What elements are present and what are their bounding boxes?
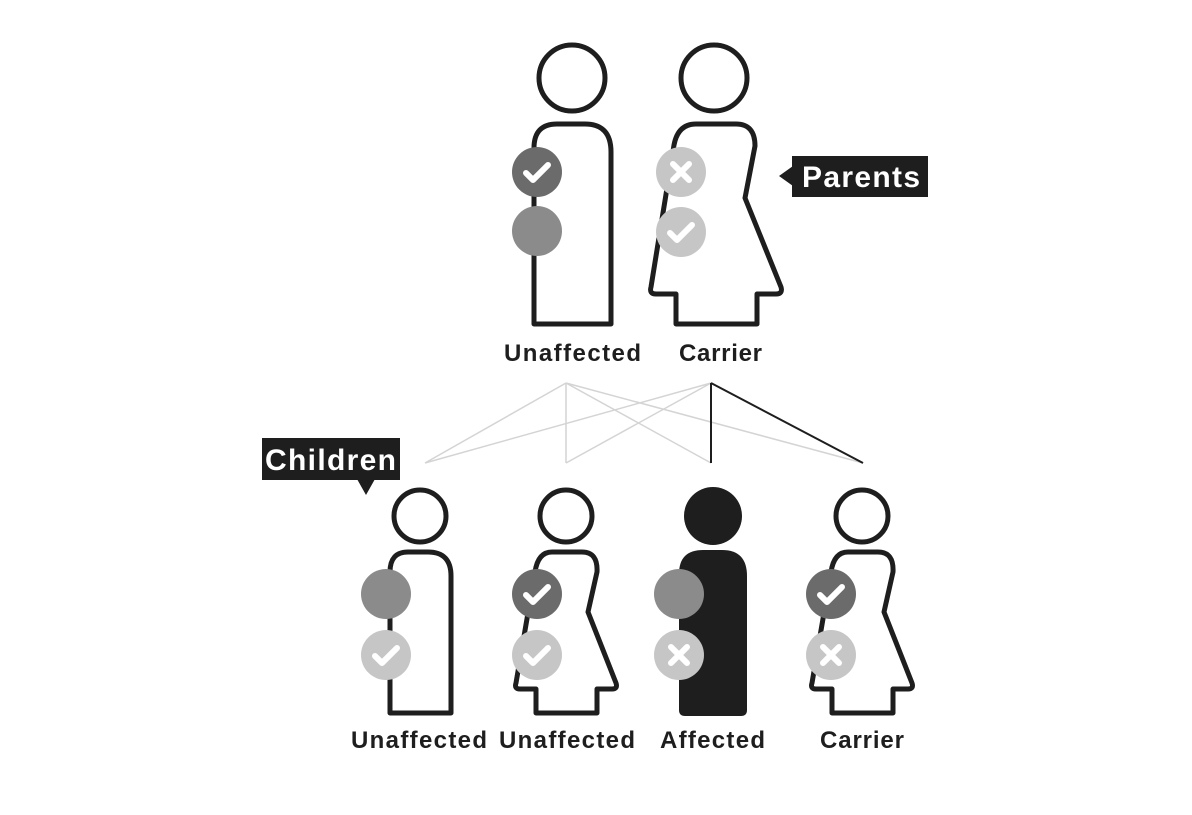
parent: carrier female bbox=[651, 45, 781, 324]
children labels bbox=[351, 727, 904, 754]
connection lines bbox=[425, 383, 863, 463]
children labels: Unaffected bbox=[499, 727, 635, 754]
children labels: Affected bbox=[660, 727, 765, 754]
parent labels: Unaffected bbox=[504, 340, 641, 367]
parent labels bbox=[504, 340, 762, 367]
child 3: affected male bbox=[654, 487, 747, 716]
parent labels: Carrier bbox=[679, 340, 762, 367]
children labels: Carrier bbox=[820, 727, 904, 754]
callout: Children: Children bbox=[265, 444, 396, 477]
child 4: carrier female bbox=[806, 490, 912, 713]
callout: Children bbox=[262, 438, 400, 495]
child 2: unaffected female bbox=[512, 490, 616, 713]
parent: unaffected male bbox=[512, 45, 611, 324]
callout: Parents bbox=[779, 156, 928, 197]
callout: Parents: Parents bbox=[802, 161, 920, 194]
children labels: Unaffected bbox=[351, 727, 487, 754]
child 1: unaffected male bbox=[361, 490, 451, 713]
